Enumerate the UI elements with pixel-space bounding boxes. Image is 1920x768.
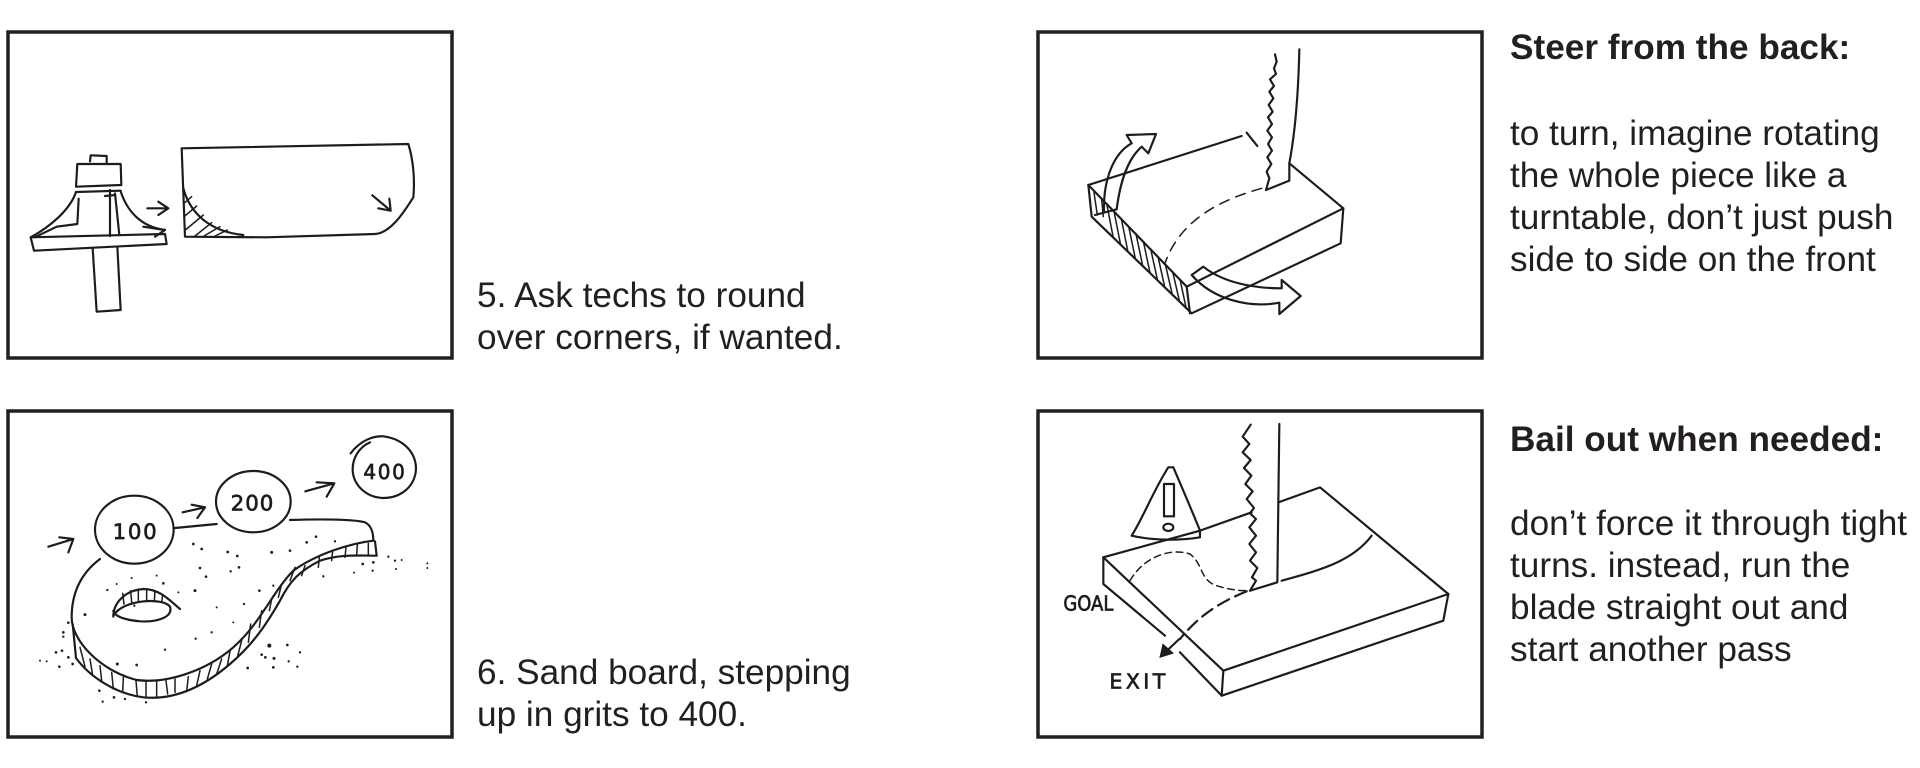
arrow: rotate up: [1095, 134, 1156, 215]
text: bail out explanation: blade straight out and: [1510, 588, 1848, 627]
icon: grit discs: 100: [113, 520, 158, 545]
cut line: [1165, 188, 1262, 263]
icon: board with rounded corners: [182, 144, 414, 237]
panel: round over corners sketch: [8, 32, 452, 358]
heading: steer from the back: Steer from the back:: [1510, 28, 1850, 67]
icon: workpiece board: [1088, 133, 1343, 313]
icon: workpiece board: [1103, 487, 1448, 696]
text: steer explanation: the whole piece like a: [1510, 156, 1847, 195]
panel: sanding sketch: [8, 411, 452, 737]
text: bail out explanation: turns. instead, run the: [1510, 546, 1850, 585]
text: bail out explanation: don’t force it through tight: [1510, 504, 1907, 543]
icon: bandsaw blade: [1266, 49, 1299, 190]
text: steer explanation: to turn, imagine rotating: [1510, 114, 1880, 153]
sanding dust: [39, 536, 428, 703]
caption: step 6: up in grits to 400.: [477, 695, 747, 734]
icon: warning triangle: [1132, 467, 1200, 540]
icon: bandsaw blade: [1243, 424, 1279, 591]
text: bail out explanation: start another pass: [1510, 630, 1792, 669]
icon: grit discs: 200: [231, 492, 274, 517]
dotted goal path: [1130, 552, 1247, 591]
caption: step 6: 6. Sand board, stepping: [477, 653, 851, 692]
icon: sanded board: [72, 519, 377, 698]
caption: step 6: [477, 653, 851, 734]
label: exit: EXIT: [1109, 670, 1166, 694]
caption: step 5: over corners, if wanted.: [477, 318, 843, 357]
text: bail out explanation: [1510, 504, 1907, 669]
icon: grit discs: [95, 436, 416, 564]
label: goal: GOAL: [1063, 592, 1114, 616]
text: steer explanation: turntable, don’t just push: [1510, 198, 1893, 237]
text: steer explanation: [1510, 114, 1893, 279]
arrow: rotate right: [1192, 267, 1301, 314]
caption: step 5: [477, 276, 843, 357]
panel: bail out sketch: [1038, 411, 1482, 737]
arrows: grit progression: [48, 482, 334, 552]
caption: step 5: 5. Ask techs to round: [477, 276, 806, 315]
heading: bail out: Bail out when needed:: [1510, 420, 1883, 459]
icon: grit discs: 400: [363, 460, 406, 484]
panel: steer from the back sketch: [1038, 32, 1482, 358]
icon: router bit: [31, 155, 167, 312]
arrow: exit path: [1159, 591, 1247, 658]
arrow: bit to board: [147, 202, 168, 215]
text: steer explanation: side to side on the front: [1510, 240, 1876, 279]
